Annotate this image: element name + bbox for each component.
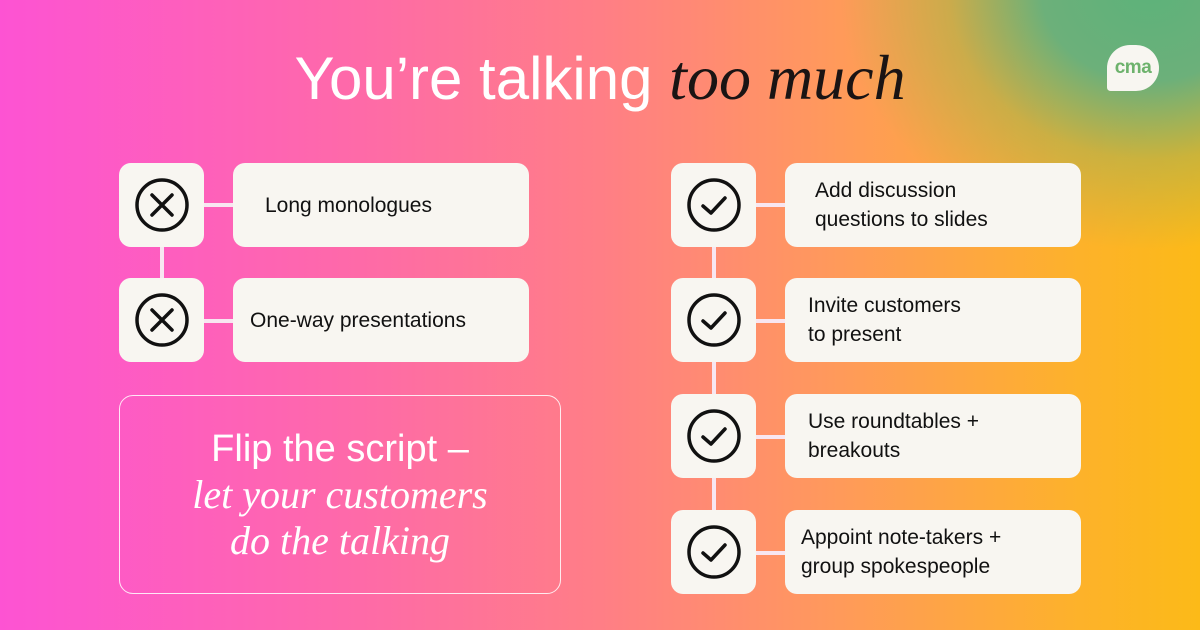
item: Long monologues: Long monologues	[265, 194, 432, 216]
item	[785, 163, 1081, 247]
item: questions to slides	[815, 208, 988, 231]
item: to present	[808, 323, 901, 346]
item	[785, 278, 1081, 362]
callout	[119, 395, 561, 594]
item: Appoint note-takers +	[801, 526, 1001, 549]
callout: let your customers	[192, 472, 488, 516]
title: You’re talking too much	[294, 42, 906, 113]
panel: dos	[671, 163, 1081, 594]
logo: cma	[1107, 45, 1159, 91]
icon: x	[119, 163, 204, 247]
item: Use roundtables +	[808, 410, 979, 433]
logo: cma: cma	[1115, 57, 1151, 78]
item: Add discussion	[815, 179, 956, 202]
icon: check	[671, 163, 756, 247]
item: One-way presentations	[233, 278, 529, 362]
item: group spokespeople	[801, 555, 990, 578]
item: One-way presentations: One-way presentations	[250, 308, 466, 332]
icon: x	[119, 278, 204, 362]
item: Long monologues	[233, 163, 529, 247]
icon: check	[671, 510, 756, 594]
icon: check	[671, 278, 756, 362]
item: breakouts	[808, 439, 900, 462]
icon: check	[671, 394, 756, 478]
panel: don'ts	[119, 163, 529, 362]
item: Invite customers	[808, 294, 961, 317]
item	[785, 510, 1081, 594]
callout: Flip the script –	[211, 428, 469, 470]
callout: do the talking	[230, 518, 450, 562]
item	[785, 394, 1081, 478]
